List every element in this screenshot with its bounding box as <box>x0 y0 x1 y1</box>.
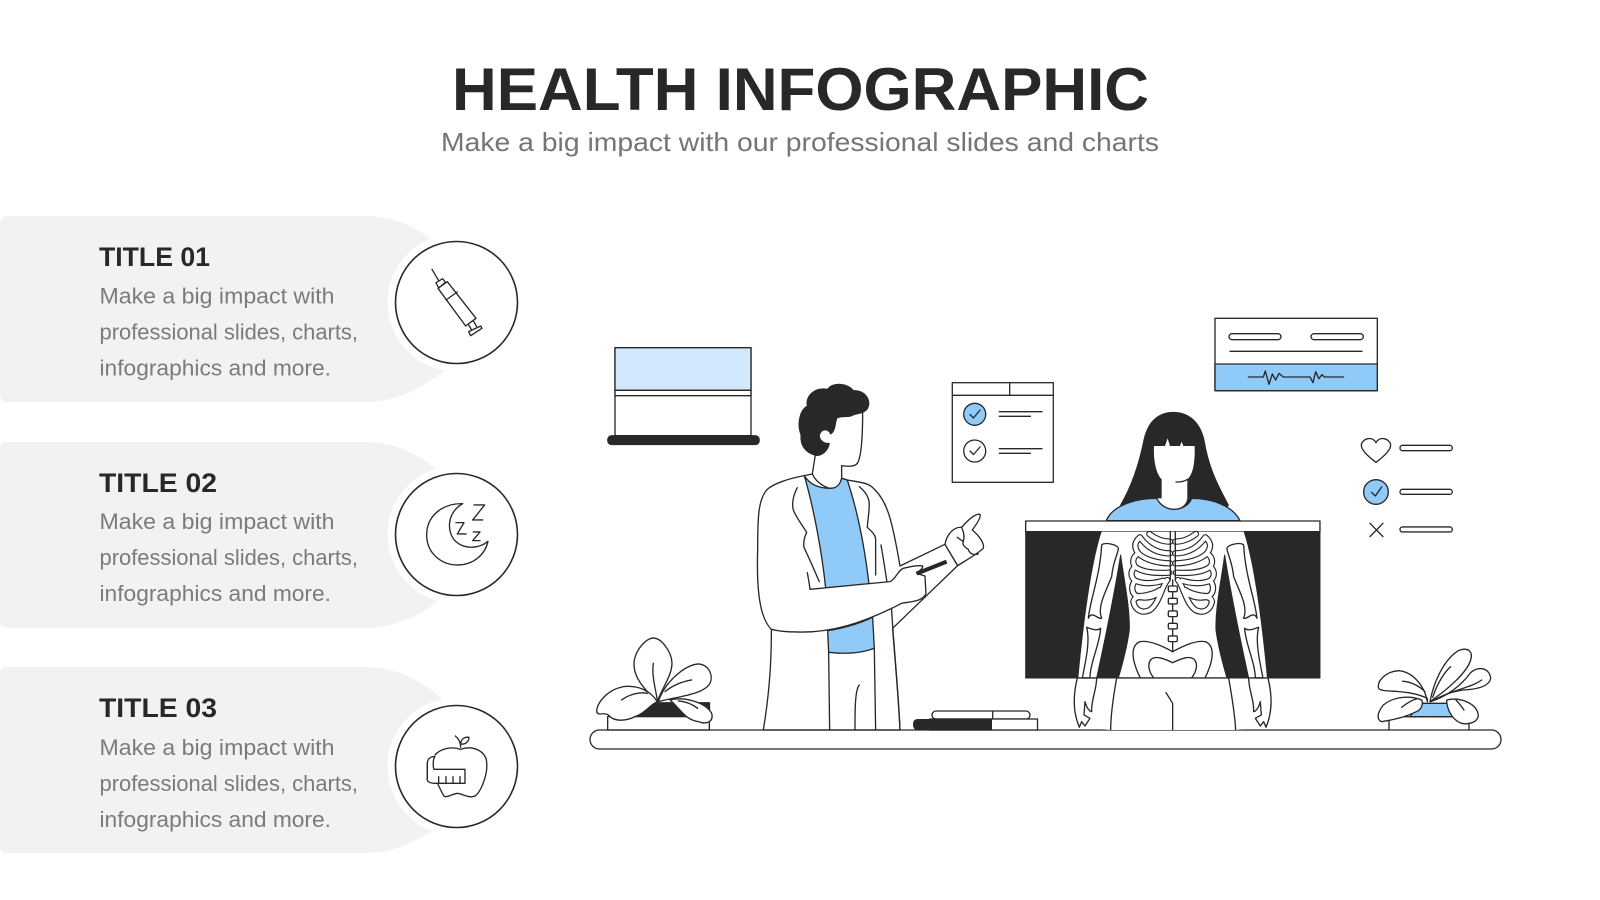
window <box>608 348 759 445</box>
text block: title 02: infographics and more. <box>100 581 331 606</box>
icon: moon and sleep <box>396 474 518 596</box>
woman behind x-ray monitor <box>1026 412 1320 730</box>
books <box>913 711 1038 730</box>
text block: title 02 <box>100 509 358 606</box>
x-ray monitor <box>1026 521 1320 678</box>
hair <box>799 384 869 456</box>
heading: title 02: TITLE 02 <box>99 468 217 498</box>
floor shelf <box>590 730 1501 749</box>
icon: syringe <box>396 242 518 364</box>
trousers <box>829 648 876 730</box>
text block: title 01: infographics and more. <box>100 356 331 380</box>
panel: title 03 <box>0 667 526 853</box>
text block: title 03: professional slides, charts, <box>100 771 358 796</box>
heading: title 03: TITLE 03 <box>99 693 217 723</box>
neck and face <box>812 413 863 488</box>
text block: title 01 <box>100 284 358 380</box>
blue top <box>1106 498 1240 521</box>
heading: title 01: TITLE 01 <box>99 242 210 272</box>
title: HEALTH INFOGRAPHIC <box>452 56 1149 123</box>
list bars <box>1400 445 1452 532</box>
subtitle: Make a big impact with our professional slides and charts <box>441 127 1159 157</box>
ecg card <box>1215 318 1377 391</box>
hair <box>1121 412 1228 517</box>
pointing hand <box>945 514 984 566</box>
spine <box>1168 532 1177 652</box>
text block: title 01: Make a big impact with <box>100 284 334 308</box>
panel: title 01 <box>0 216 526 402</box>
lapels <box>793 488 819 582</box>
x-ray body <box>1078 532 1267 678</box>
text block: title 02: professional slides, charts, <box>100 545 358 570</box>
face and neck <box>1154 438 1195 509</box>
doctor <box>757 384 984 730</box>
illustration: health scene <box>590 318 1501 749</box>
text block: title 03: Make a big impact with <box>100 735 334 760</box>
coat <box>757 474 958 730</box>
status list <box>1361 439 1452 537</box>
pen <box>917 562 947 574</box>
right plant <box>1378 649 1491 730</box>
text block: title 03: infographics and more. <box>100 807 331 832</box>
forearm <box>797 566 926 632</box>
blue shirt <box>804 476 869 588</box>
text block: title 02: Make a big impact with <box>100 509 334 534</box>
panel: title 02 <box>0 442 526 628</box>
text block: title 01: professional slides, charts, <box>100 320 358 344</box>
icon: cross <box>1370 523 1383 537</box>
icon: check <box>1364 480 1388 504</box>
skeleton left half <box>1082 534 1173 678</box>
left plant <box>597 638 712 730</box>
checklist card <box>952 383 1053 482</box>
lower body <box>1074 678 1271 730</box>
text block: title 03 <box>100 735 358 832</box>
skeleton right half <box>1173 534 1263 678</box>
icon: apple and tape measure <box>396 706 518 828</box>
icon: heart <box>1361 439 1391 462</box>
